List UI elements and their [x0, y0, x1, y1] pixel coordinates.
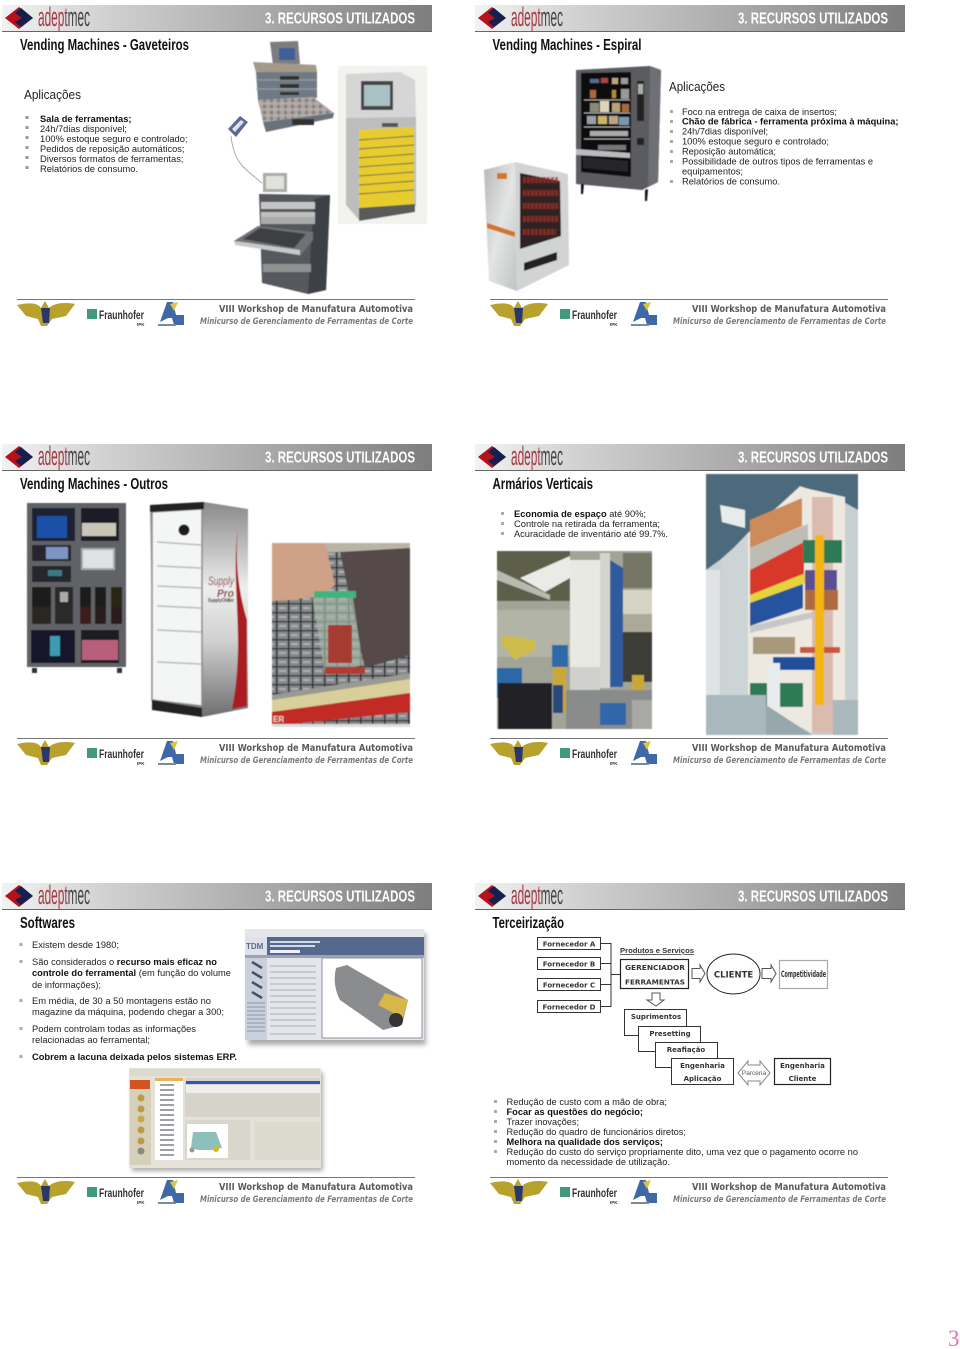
- competitiveness box: Competitividade: [781, 970, 826, 980]
- bullet list: Pedidos de reposição automáticos;: [40, 144, 184, 155]
- icon: ADG logo: [158, 1180, 184, 1204]
- icon: adeptmec logo: [478, 2, 563, 32]
- heading: Terceirização: [492, 915, 564, 932]
- icon: adeptmec logo: adeptmec: [38, 2, 90, 32]
- bullet list: Sala de ferramentas;: [40, 114, 132, 125]
- footer with partner logos: [17, 738, 415, 766]
- image: handheld scanner and cable: [228, 116, 262, 183]
- workshop credit: VIII Workshop de Manufatura Automotiva: [692, 1182, 886, 1193]
- bullet list: Em média, de 30 a 50 montagens estão no: [32, 996, 211, 1007]
- icon: adeptmec logo: [478, 441, 563, 471]
- image: silver vending machine: [484, 162, 569, 291]
- header title: 3. RECURSOS UTILIZADOS: [738, 450, 888, 466]
- supplier labels: Fornecedor B: [543, 960, 595, 968]
- header bar: [475, 880, 905, 910]
- bullet list: Foco na entrega de caixa de insertos;: [682, 107, 837, 118]
- client ellipse: CLIENTE: [714, 970, 753, 980]
- header title: 3. RECURSOS UTILIZADOS: [265, 450, 415, 466]
- icon: Fraunhofer: [560, 308, 618, 327]
- icon: Fraunhofer: Fraunhofer: [572, 1186, 617, 1200]
- bullet list: 24h/7dias disponível;: [40, 124, 127, 135]
- image: SupplyPro fridge machine: SupplyChiller: [208, 598, 234, 604]
- panel: Armários Verticais: [475, 441, 905, 766]
- competitiveness box: [780, 960, 828, 988]
- bullet list: Podem controlam todas as informações: [32, 1024, 196, 1035]
- footer with partner logos: [490, 738, 888, 766]
- image: top drawer machine: [253, 41, 334, 132]
- bullet list: controle do ferramental (em função do volume: [32, 968, 231, 979]
- panel: Vending Machines - Outros: [2, 441, 432, 766]
- service chain: Reafiação: [667, 1046, 705, 1054]
- products label: Produtos e Serviços: [620, 946, 694, 955]
- heading: Vending Machines - Gaveteiros: [20, 37, 189, 54]
- screenshot: tool management software: [129, 1068, 323, 1171]
- panel: Terceirização: [475, 880, 905, 1205]
- icon: Fraunhofer: IPK: [610, 1200, 618, 1205]
- workshop credit: Minicurso de Gerenciamento de Ferramentas de Corte: [200, 317, 413, 327]
- icon: Fraunhofer: IPK: [610, 322, 618, 327]
- icon: Fraunhofer: IPK: [137, 322, 145, 327]
- bullet list: 100% estoque seguro e controlado;: [682, 136, 829, 148]
- icon: Fraunhofer: Fraunhofer: [99, 1186, 144, 1200]
- heading: Vending Machines - Outros: [20, 476, 168, 493]
- header title: 3. RECURSOS UTILIZADOS: [738, 10, 888, 28]
- arrow down: [647, 993, 664, 1006]
- icon: ADG logo: [158, 302, 184, 326]
- icon: ITA eagle: [490, 301, 548, 326]
- workshop credit: [200, 1182, 413, 1205]
- workshop credit: Minicurso de Gerenciamento de Ferramentas de Corte: [200, 756, 413, 766]
- workshop credit: [200, 743, 413, 766]
- bullet list: Chão de fábrica - ferramenta próxima à máquina;: [682, 116, 898, 128]
- icon: ITA eagle: [17, 1179, 75, 1204]
- image: yellow drawer cabinet: [338, 66, 427, 224]
- service chain: Engenharia: [680, 1062, 725, 1070]
- subheading: Aplicações: [24, 87, 81, 102]
- bullet list: Redução do custo do serviço propriamente dito, uma vez que o pagamento ocorre no: [506, 1147, 858, 1158]
- icon: ITA eagle: [490, 1179, 548, 1204]
- manager box: GERENCIADOR: [625, 964, 686, 972]
- screenshot: TDM software with tool model: [245, 929, 426, 1045]
- workshop credit: [200, 304, 413, 327]
- image: photo hand picking insert box: [272, 543, 410, 727]
- icon: ITA eagle: [17, 740, 75, 765]
- header bar: [2, 880, 432, 910]
- bullet list: Redução do quadro de funcionários diretos;: [506, 1127, 686, 1138]
- icon: Fraunhofer: Fraunhofer: [572, 308, 617, 322]
- heading: Armários Verticais: [492, 476, 593, 493]
- bullet list: momento da necessidade de utilização.: [506, 1157, 670, 1168]
- header bar: [2, 441, 432, 471]
- heading: Vending Machines - Espiral: [492, 37, 642, 54]
- bullet list: [501, 509, 668, 540]
- bullet list: Reposição automática;: [682, 146, 776, 158]
- icon: Fraunhofer: IPK: [137, 761, 145, 766]
- workshop credit: VIII Workshop de Manufatura Automotiva: [692, 743, 886, 754]
- icon: ADG logo: [158, 741, 184, 765]
- icon: Fraunhofer: [87, 1186, 145, 1205]
- icon: Fraunhofer: [560, 1186, 618, 1205]
- workshop credit: [673, 1182, 886, 1205]
- icon: ADG logo: [631, 741, 657, 765]
- footer with partner logos: [17, 1177, 415, 1205]
- workshop credit: Minicurso de Gerenciamento de Ferramentas de Corte: [673, 756, 886, 766]
- client engineering box: [774, 1058, 830, 1084]
- header title: 3. RECURSOS UTILIZADOS: [265, 10, 415, 28]
- bullet list: [26, 114, 188, 175]
- supplier labels: [543, 940, 596, 1012]
- workshop credit: [673, 743, 886, 766]
- image: photo hand picking insert box: ER: [273, 715, 284, 724]
- bullet list: Relatórios de consumo.: [682, 176, 780, 188]
- workshop credit: [673, 304, 886, 327]
- bullet list: Focar as questões do negócio;: [506, 1107, 643, 1118]
- supplier labels: Fornecedor C: [543, 982, 595, 990]
- bullet list: São considerados o recurso mais eficaz no: [32, 957, 217, 968]
- bullet list: Melhora na qualidade dos serviços;: [506, 1137, 663, 1148]
- screenshot: TDM software with tool model: TDM: [246, 942, 264, 951]
- bullet list: magazine da máquina, podendo chegar a 300;: [32, 1007, 224, 1018]
- manager box: [620, 960, 688, 988]
- service chain: [624, 1010, 734, 1084]
- bullet list: Economia de espaço até 90%;: [514, 509, 646, 520]
- bullet list: relacionadas ao ferramental;: [32, 1035, 150, 1046]
- workshop credit: VIII Workshop de Manufatura Automotiva: [219, 304, 413, 315]
- header bar: [2, 2, 432, 32]
- workshop credit: VIII Workshop de Manufatura Automotiva: [219, 743, 413, 754]
- bullet list: Controle na retirada da ferramenta;: [514, 519, 660, 530]
- icon: adeptmec logo: adeptmec: [511, 2, 563, 32]
- bullet list: Diversos formatos de ferramentas;: [40, 154, 184, 165]
- icon: adeptmec logo: [478, 880, 563, 910]
- service chain: Aplicação: [684, 1075, 722, 1083]
- supplier labels: Fornecedor A: [543, 940, 596, 948]
- icon: Fraunhofer: [560, 747, 618, 766]
- footer with partner logos: [490, 299, 888, 327]
- workshop credit: VIII Workshop de Manufatura Automotiva: [219, 1182, 413, 1193]
- header title: 3. RECURSOS UTILIZADOS: [265, 888, 415, 906]
- footer with partner logos: [17, 299, 415, 327]
- image: dark drawer cabinet: [234, 173, 330, 294]
- icon: ITA eagle: [17, 301, 75, 326]
- image: locker vending machine: [27, 503, 126, 673]
- bullet list: [670, 107, 898, 188]
- bullet list: [494, 1097, 858, 1168]
- partnership arrow: [738, 1061, 770, 1085]
- panel: Vending Machines - Espiral: [475, 2, 905, 327]
- bullet list: Redução de custo com a mão de obra;: [506, 1097, 667, 1108]
- arrow to competitiveness: [762, 965, 776, 982]
- bullet list: equipamentos;: [682, 166, 743, 178]
- header bar: [475, 2, 905, 32]
- bullet list: Acuracidade de inventário até 99.7%.: [514, 529, 668, 540]
- image: SupplyPro fridge machine: Pro: [217, 588, 234, 600]
- image: photo of vertical storage in factory: [497, 551, 652, 729]
- icon: adeptmec logo: [5, 2, 90, 32]
- partnership arrow: Parceria: [742, 1070, 766, 1077]
- icon: Fraunhofer: IPK: [137, 1200, 145, 1205]
- workshop credit: VIII Workshop de Manufatura Automotiva: [692, 304, 886, 315]
- icon: ADG logo: [631, 302, 657, 326]
- icon: adeptmec logo: adeptmec: [511, 880, 563, 910]
- flow diagram: outsourcing: [538, 938, 830, 1085]
- panel: Softwares: [2, 880, 432, 1205]
- icon: adeptmec logo: [5, 441, 90, 471]
- image: dark spiral vending machine: [576, 66, 661, 201]
- header title: 3. RECURSOS UTILIZADOS: [738, 888, 888, 906]
- icon: Fraunhofer: IPK: [610, 761, 618, 766]
- bullet list: [20, 940, 237, 1063]
- bullet list: 24h/7dias disponível;: [682, 126, 768, 138]
- icon: adeptmec logo: adeptmec: [38, 441, 90, 471]
- bullet list: 100% estoque seguro e controlado;: [40, 134, 188, 145]
- client engineering box: Engenharia: [780, 1062, 825, 1070]
- heading: Softwares: [20, 915, 75, 932]
- icon: adeptmec logo: adeptmec: [38, 880, 90, 910]
- footer with partner logos: [490, 1177, 888, 1205]
- icon: Fraunhofer: Fraunhofer: [99, 308, 144, 322]
- workshop credit: Minicurso de Gerenciamento de Ferramentas de Corte: [200, 1195, 413, 1205]
- subheading: Aplicações: [669, 79, 725, 94]
- client ellipse: [707, 954, 760, 994]
- icon: adeptmec logo: [5, 880, 90, 910]
- image: SupplyPro fridge machine: Supply: [208, 574, 235, 588]
- supplier labels: Fornecedor D: [543, 1004, 596, 1012]
- image: SupplyPro fridge machine: [150, 502, 248, 717]
- service chain: Suprimentos: [631, 1013, 681, 1021]
- bullet list: Relatórios de consumo.: [40, 164, 138, 175]
- client engineering box: Cliente: [789, 1075, 817, 1083]
- icon: ADG logo: [631, 1180, 657, 1204]
- suppliers: [538, 938, 620, 1012]
- service chain: Presetting: [649, 1030, 691, 1038]
- bullet list: Possibilidade de outros tipos de ferramentas e: [682, 156, 873, 168]
- bullet list: Cobrem a lacuna deixada pelos sistemas ERP.: [32, 1052, 237, 1063]
- icon: Fraunhofer: [87, 308, 145, 327]
- bullet list: Existem desde 1980;: [32, 940, 119, 951]
- icon: adeptmec logo: adeptmec: [511, 441, 563, 471]
- panel: Vending Machines - Gaveteiros: [2, 2, 432, 327]
- icon: Fraunhofer: Fraunhofer: [99, 747, 144, 761]
- icon: Fraunhofer: [87, 747, 145, 766]
- bullet list: de informações);: [32, 980, 101, 991]
- arrow to client: [692, 965, 705, 982]
- icon: Fraunhofer: Fraunhofer: [572, 747, 617, 761]
- manager box: FERRAMENTAS: [625, 978, 685, 986]
- workshop credit: Minicurso de Gerenciamento de Ferramentas de Corte: [673, 1195, 886, 1205]
- bullet list: Trazer inovações;: [506, 1117, 579, 1128]
- header bar: [475, 441, 905, 471]
- image: cutaway of vertical storage carousel: [706, 474, 858, 735]
- icon: ITA eagle: [490, 740, 548, 765]
- workshop credit: Minicurso de Gerenciamento de Ferramentas de Corte: [673, 317, 886, 327]
